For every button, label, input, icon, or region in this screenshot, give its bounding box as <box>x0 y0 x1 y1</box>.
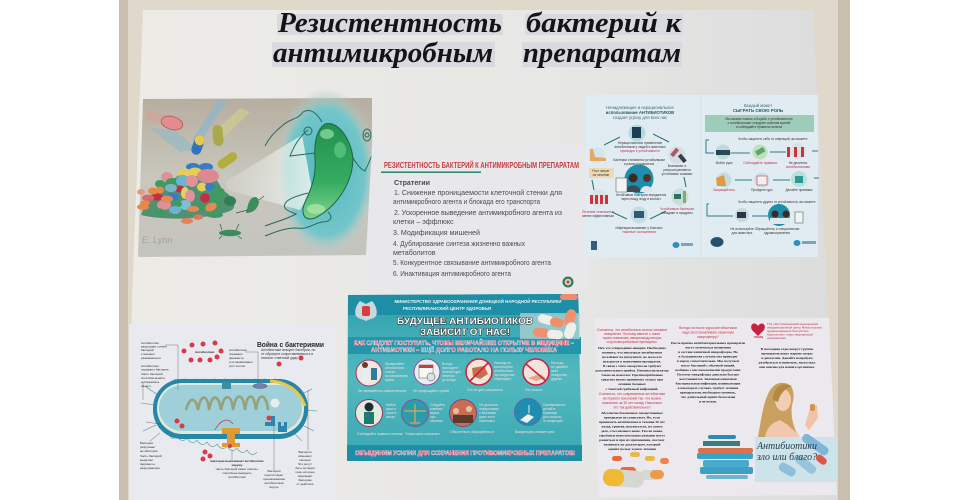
column 1 text: препаратов не существует. Но, если <box>604 416 660 420</box>
column 2 text: в норму самостоятельно. Мы получаем <box>677 359 740 363</box>
callout labels: Бактерии <box>267 469 281 473</box>
efflux pump <box>222 428 240 447</box>
title <box>272 7 683 69</box>
advice texts: руки и <box>386 407 396 411</box>
callout labels: ферменты <box>229 356 244 360</box>
column 1 text: принимать антибиотики в течение 30 лет <box>599 420 665 424</box>
column 1 text: не влияют на иммунитет, но мало кто <box>602 355 662 359</box>
callout labels: ферменты, <box>140 462 156 466</box>
advice texts: другим <box>551 377 562 381</box>
antibiotic molecules <box>174 340 304 462</box>
advice texts: Не делитесь <box>479 403 498 407</box>
ministry header <box>394 297 562 311</box>
strategies list <box>393 179 562 278</box>
leaflet left cycle diagram: устойчивые штаммы <box>662 172 693 176</box>
callout labels: Бактерии выкачивают антибиотики <box>210 459 264 463</box>
advice texts: при вирусных <box>494 373 515 377</box>
poster heading: Антибиотики атакуют бактерии, но <box>261 348 315 352</box>
poster title <box>397 316 533 338</box>
leaflet left heading: Ненадлежащее и нерациональное <box>606 105 674 110</box>
leaflet right action flow: для животных <box>732 231 753 235</box>
photo: woman with pill <box>758 383 818 437</box>
pills photo <box>520 294 580 340</box>
column 2 text: массу бактерий с обычной пищей, <box>681 364 735 368</box>
callout labels: антибиотики <box>228 475 246 479</box>
strategies list: Стратегии <box>394 179 430 187</box>
callout labels: Антибиотики <box>229 348 247 352</box>
leaflet right action flow: Чтобы защитить других от устойчивости, вы можете: <box>738 200 816 204</box>
strategies list: 1. Снижение проницаемости клеточной стенки для <box>394 189 562 197</box>
advice texts: инфекциях <box>494 377 511 381</box>
stacked blister packs <box>697 435 753 479</box>
advice texts: проходите <box>442 366 458 370</box>
callout labels: мишени <box>299 458 311 462</box>
advice texts: с близкими <box>479 411 496 415</box>
advice texts: используйте <box>494 365 513 369</box>
column 1 text: назад, уровень опасности их, на самом <box>602 424 663 428</box>
advice texts: лекарствами <box>479 407 499 411</box>
slide heading: РЕЗИСТЕНТНОСТЬ БАКТЕРИЙ К АНТИМИКРОБНЫМ ПРЕПАРАТАМ <box>384 159 579 170</box>
leaflet right action flow: антибиотиками <box>786 165 810 169</box>
callout labels: антибиотики <box>140 449 158 453</box>
advice texts: Только врач назначает <box>405 432 440 436</box>
callout labels: и останавливают <box>229 360 253 364</box>
leaflet left cycle diagram: менее эффективным <box>582 214 614 218</box>
column 2 text: в некоторых случаях, требует лечения <box>678 386 738 390</box>
advice texts: Не занимайтесь самолечением <box>358 389 407 393</box>
strategies list: клетки – эффлюкс <box>393 218 454 226</box>
strategies list: 2. Ускоренное выведение антимикробного агента из <box>394 209 562 217</box>
leaflet right action flow: Пройдите курс <box>751 188 773 192</box>
strategies list: метаболитов <box>393 249 436 257</box>
column 2 text: особенно с кисломолочными продуктами. <box>675 368 741 372</box>
callout labels: разрушающие <box>140 466 160 470</box>
column 1 text: В связи с этим лекарства не требуют <box>603 364 661 368</box>
bacterium <box>265 110 372 236</box>
panel: strategies slide <box>364 145 588 291</box>
column 3 text: В последние годы вокруг группы <box>761 347 814 351</box>
advice texts: до конца <box>442 378 456 382</box>
column 3 text <box>759 347 816 369</box>
poster heading: те образуют сопротивляемость и <box>261 352 313 356</box>
brochure logo block <box>751 322 822 340</box>
advice texts: Это опасно <box>525 388 543 392</box>
callout labels: Антибиотики <box>141 364 159 368</box>
leaflet left cycle diagram: Устойчивые бактерии <box>660 207 694 211</box>
advice texts: симптомы <box>479 419 495 423</box>
advice texts: Обязательно обращайтесь в <box>450 430 494 434</box>
title: Резистентность <box>277 7 502 39</box>
flying pills <box>160 114 239 170</box>
column 1 text: и противогрибковые препараты. <box>607 340 657 344</box>
illustration: bacterium and pills <box>137 88 378 257</box>
column 3 text: препаратов ведут жаркие споры <box>761 352 813 356</box>
panel: WHO leaflet <box>582 95 819 257</box>
advice texts: даже если <box>479 415 495 419</box>
column 2 text: что длительный приём бесполезен <box>681 395 735 399</box>
leaflet left cycle diagram: и распространяются <box>624 162 654 166</box>
question banner: АНТИБИОТИКИ – ЕЩЁ ДОЛГО РАБОТАЛО НА ПОЛЬЗУ ЧЕЛОВЕКА <box>371 347 558 354</box>
callout labels: поражают <box>229 352 243 356</box>
leaflet left cycle diagram: Рост затрат <box>592 169 610 173</box>
banner: antibiotics question <box>755 432 837 482</box>
panel: bacteria war poster <box>129 324 335 500</box>
advice texts: Всегда <box>442 362 453 366</box>
column 3 text: и дискуссии. Давайте попробуем <box>761 356 813 360</box>
column 3 text: разобраться и понимать, насколько <box>759 360 816 364</box>
callout labels: Часть бактерий <box>140 454 162 458</box>
callout labels: бактерию <box>298 478 312 482</box>
advice texts: полный курс <box>442 370 461 374</box>
column 2 text: и не нужен. <box>699 400 717 404</box>
title: препаратам <box>523 37 681 69</box>
callout labels <box>140 341 315 489</box>
brochure logo block: здравоохранения Республики <box>767 329 809 333</box>
callout labels: Часть бактерий имеет насосы, <box>216 467 258 471</box>
poster title: ЗАВИСИТ ОТ НАС! <box>420 327 510 338</box>
advice texts: лечении <box>430 419 443 423</box>
poster heading <box>257 341 324 360</box>
leaflet right heading: СЫГРАТЬ СВОЮ РОЛЬ <box>733 108 783 113</box>
leaflet left cycle diagram <box>582 124 694 234</box>
leaflet left heading: создает угрозу для всех нас <box>613 115 667 120</box>
banner: antibiotics question: зло или благо? <box>756 452 818 463</box>
callout labels: Антибиотики <box>141 341 159 345</box>
brochure logo block: Кыргызстан» отдел медицинской <box>767 332 813 336</box>
callout labels: от действия <box>297 482 314 486</box>
pill pile <box>137 163 264 239</box>
callout labels: рост клетки <box>229 364 245 368</box>
leaflet right action flow: здравоохранения <box>764 231 790 235</box>
leaflet left cycle diagram: Возникают и <box>668 164 686 168</box>
advice texts: Применяйте <box>385 362 404 366</box>
column 1 text: средства нужно принимать только при <box>601 378 663 382</box>
leaflet left cycle diagram: на лечение <box>593 173 610 177</box>
leaflet right action flow: Соблюдайте правила <box>743 161 777 165</box>
column 1 text: серьёзные нежелательные реакции могут <box>599 434 665 438</box>
leaflet left cycle diagram: попадают в продукты <box>661 211 694 215</box>
advice texts: Следуйте <box>430 403 445 407</box>
leaflet left cycle diagram: распространяются <box>663 168 691 172</box>
leaflet left cycle diagram: антибиотиков у людей и животных <box>614 145 666 149</box>
leaflet left cycle diagram: Нерациональное применение <box>618 141 662 145</box>
column 2 text: После приёма антибактериальных препаратов <box>671 341 745 345</box>
column 2 text: в большинстве случаев она приходит <box>678 354 738 358</box>
callout labels: наружу <box>232 463 243 467</box>
leaflet right heading: Каждый может <box>744 103 772 108</box>
callout labels: способные выводить <box>222 471 252 475</box>
column 2 text: бактериальная инфекция, возникающая <box>676 382 740 386</box>
leaflet right action flow: Мойте руки <box>716 161 733 165</box>
poster heading: наносят ответный удар <box>261 356 298 360</box>
WHO logos <box>591 237 816 250</box>
strategies list: 6. Инактивация антимикробного агента <box>393 270 511 278</box>
advice texts: по назначению <box>385 374 408 378</box>
leaflet right action flow: Не используйте <box>730 227 754 231</box>
banner: antibiotics question: Антибиотики <box>756 441 817 452</box>
leaflet left heading: использование АНТИБИОТИКОВ <box>606 110 674 115</box>
brochure logo block: РЕМЦ <box>754 335 764 339</box>
callout labels: антибиотиков <box>264 481 284 485</box>
callout labels: бактерий <box>141 348 154 352</box>
callout labels: поражают бактерии <box>141 368 169 372</box>
column 2 text: восстановится. Значимая кишечная <box>679 377 737 381</box>
column 2 text <box>671 326 745 404</box>
column 1 text: помнить, что некоторые антибиотики <box>602 350 662 354</box>
advice texts: антибиотики <box>385 366 404 370</box>
wall background <box>119 0 850 500</box>
advice texts: врача <box>430 411 439 415</box>
advice texts: только <box>385 370 395 374</box>
ministry header: РЕСПУБЛИКАНСКИЙ ЦЕНТР ЗДОРОВЬЯ <box>403 304 491 311</box>
advice texts: прививки <box>543 411 557 415</box>
column 1 text: назначать за 30 лет назад. Насколько <box>602 401 662 405</box>
advice texts: делайте <box>543 407 556 411</box>
leaflet right action flow <box>706 137 819 235</box>
advice texts: маску <box>386 415 395 419</box>
advice texts: Соблюдайте правила гигиены <box>357 432 404 436</box>
column 2 text: Поэтому микрофлора довольно быстро <box>677 372 739 376</box>
leaflet right action flow: Делайте прививки <box>786 188 813 192</box>
column 1 text: дополнительного приёма. Иммуностимулятор <box>595 368 669 372</box>
advice texts: советам <box>430 407 443 411</box>
column 2 text: в составе кишечной микрофлоры. Но <box>678 350 738 354</box>
advice texts: Никогда не <box>494 361 511 365</box>
column 1 text: Считается, что современные антибиотики <box>599 392 665 396</box>
column 1 text: Абсолютно безопасных лекарственных <box>601 411 663 415</box>
leaflet right action flow: Чтобы защитить себя от инфекций, вы можете: <box>738 137 808 141</box>
artist signature: E. Lynn <box>142 235 172 245</box>
advice texts: носите <box>386 411 397 415</box>
callout labels: внутрь <box>269 485 279 489</box>
leaflet left cycle diagram: Бактерии становятся устойчивыми <box>613 158 665 162</box>
advice texts: не давайте <box>551 365 568 369</box>
poster heading: Война с бактериями <box>257 341 324 349</box>
column 2 text: могут отмечаться изменения <box>685 346 731 350</box>
column 1 text: нуждается в назначении препаратов. <box>603 360 661 364</box>
advice texts: лекарства <box>551 373 567 377</box>
callout labels: способна выжить <box>141 376 166 380</box>
ministry header: МИНИСТЕРСТВО ЗДРАВООХРАНЕНИЯ ДОНЕЦКОЙ НАРОДНОЙ РЕСПУБЛИКИ <box>394 297 562 304</box>
column 1 text: деле, стал намного ниже. Тем не менее, <box>601 429 663 433</box>
callout labels: и образовать <box>141 380 160 384</box>
question banner <box>354 339 575 354</box>
poster sheet <box>129 10 837 500</box>
leaflet right heading <box>733 103 783 113</box>
brochure logo block: информатики <box>767 336 786 340</box>
column 1 text: не первого поколения так, что можно <box>603 396 661 400</box>
callout labels: разрушают <box>140 445 156 449</box>
column 3 text: они опасны для нашего организма. <box>759 365 815 369</box>
callout labels: Антибиотики <box>195 350 215 354</box>
column 2 text: препаратами, необходимо помнить, <box>680 390 736 394</box>
strategies list: 4. Дублирование синтеза жизненно важных <box>393 240 525 248</box>
advice texts: антибиотики <box>494 369 513 373</box>
bottom slogan: ОБЪЕДИНИМ УСИЛИЯ ДЛЯ СОХРАНЕНИЯ ПРОТИВОМИКРОБНЫХ ПРЕПАРАТОВ! <box>355 450 575 457</box>
strategies list: 3. Модификация мишеней <box>393 229 480 237</box>
leaflet right green callout: к антибиотикам: следуйте советам врачей <box>728 121 791 125</box>
callout labels: размножаться <box>141 356 161 360</box>
column 1 text: это так действительно? <box>613 406 651 410</box>
callout labels: выделяет <box>140 458 154 462</box>
callout labels: проникновению <box>263 477 286 481</box>
advice texts: Вакцинация снижает риск <box>515 430 555 434</box>
column 1 text: назначать их должен врач, который <box>604 442 660 446</box>
column 1 text: лечении больных <box>618 382 646 386</box>
callout labels: Часть бактерий <box>141 372 163 376</box>
advice texts: лечения <box>442 374 455 378</box>
callout labels: защиту <box>141 384 152 388</box>
callout labels: Бактерии <box>140 441 153 445</box>
callout labels: разрушают стенки <box>141 344 167 348</box>
callout labels: препятствуют <box>264 473 284 477</box>
column 1 text: иммунитет. Поэтому вместе с ними <box>604 332 660 336</box>
callout labels: гена, которые <box>295 470 315 474</box>
callout labels: быть мутации <box>295 466 315 470</box>
leaflet left cycle diagram: приводит к устойчивости <box>620 149 660 153</box>
advice texts: Своевременно <box>543 403 566 407</box>
brochure logo block: информационный центр Министерства <box>767 326 822 330</box>
advice texts: Никогда <box>551 361 564 365</box>
leaflet right green callout: и соблюдайте правила гигиены <box>736 125 783 129</box>
column 1 text <box>595 328 669 451</box>
leaflet left cycle diagram: Устойчивые бактерии передаются <box>616 193 667 197</box>
leaflet left cycle diagram: через пищу, воду и контакт <box>621 197 661 201</box>
capsules <box>602 452 669 488</box>
panel: antibiotics brochure <box>595 318 837 497</box>
callout labels: Бактерии <box>298 450 312 454</box>
title: антимикробным <box>273 37 493 69</box>
column 2 text: надо восстанавливать кишечную <box>682 330 734 334</box>
advice texts: от инфекций <box>543 419 563 423</box>
leaflet right action flow: Обращайтесь к специалистам <box>755 227 799 231</box>
column 1 text: Считается, что антибиотики сильно снижают <box>597 328 668 332</box>
bacterium cross-section <box>141 379 317 455</box>
leaflet left cycle diagram: Инфекции вызывают у больных <box>615 226 663 230</box>
column 1 text: Нет, это утверждение неверно. Необходимо <box>598 346 666 350</box>
column 1 text: также не помогает. Противогрибковые <box>601 373 663 377</box>
column 2 text: Всегда ли после курса антибиотиков <box>679 326 737 330</box>
leaflet right action flow: Не делитесь <box>789 161 808 165</box>
poster title: БУДУЩЕЕ АНТИБИОТИКОВ <box>397 316 533 327</box>
brochure logo block: ГУЗ «Республиканский медицинский <box>767 322 818 326</box>
strategies list: антимикробного агента и блокада его транспорта <box>393 198 540 206</box>
advice icons row 2 <box>356 398 542 426</box>
leaflet right green callout: Мы можем помочь в борьбе с устойчивостью <box>726 117 793 121</box>
advice texts: для защиты <box>543 415 562 419</box>
strategies list: 5. Конкурентное связывание антимикробного агента <box>393 259 551 267</box>
column 2 text: микрофлору? <box>697 335 719 339</box>
leaflet left cycle diagram: Лечение становится <box>582 210 614 214</box>
advice texts: свои <box>551 369 558 373</box>
column 1 text: развиться и при их применении, поэтому <box>599 438 665 442</box>
leaflet left cycle diagram: тяжелые осложнения <box>622 230 656 234</box>
column 1 text: нужно назначать иммуномодуляторы <box>603 336 662 340</box>
page badge <box>562 276 574 288</box>
callout labels: изменяют <box>298 454 312 458</box>
column 1 text: оценит пользу и риск лечения <box>608 447 656 451</box>
leaflet left heading <box>606 105 674 120</box>
title: бактерий к <box>526 7 682 39</box>
advice texts: при <box>430 415 436 419</box>
leaflet right green callout <box>705 115 814 132</box>
leaflet right action flow: Защищайтесь <box>713 188 735 192</box>
question banner: КАК СЛЕДУЕТ ПОСТУПАТЬ, ЧТОБЫ ВЕЛИЧАЙШЕЕ ОТКРЫТИЕ В МЕДИЦИНЕ – <box>354 339 575 347</box>
advice texts: Это не даст результата <box>467 388 503 392</box>
advice texts <box>357 361 568 436</box>
panel: future of antibiotics poster <box>347 294 582 461</box>
callout labels: защищают <box>298 474 313 478</box>
advice texts: Мойте <box>386 403 396 407</box>
advice icons row 1 <box>356 359 549 386</box>
emblem <box>355 301 377 321</box>
advice texts: Не прекращайте приём <box>413 389 450 393</box>
callout labels: Это могут <box>298 462 312 466</box>
advice texts: врача <box>385 378 394 382</box>
callout labels: и мешают <box>141 352 155 356</box>
column 1 text: с тяжёлой грибковой инфекцией. <box>606 387 658 391</box>
